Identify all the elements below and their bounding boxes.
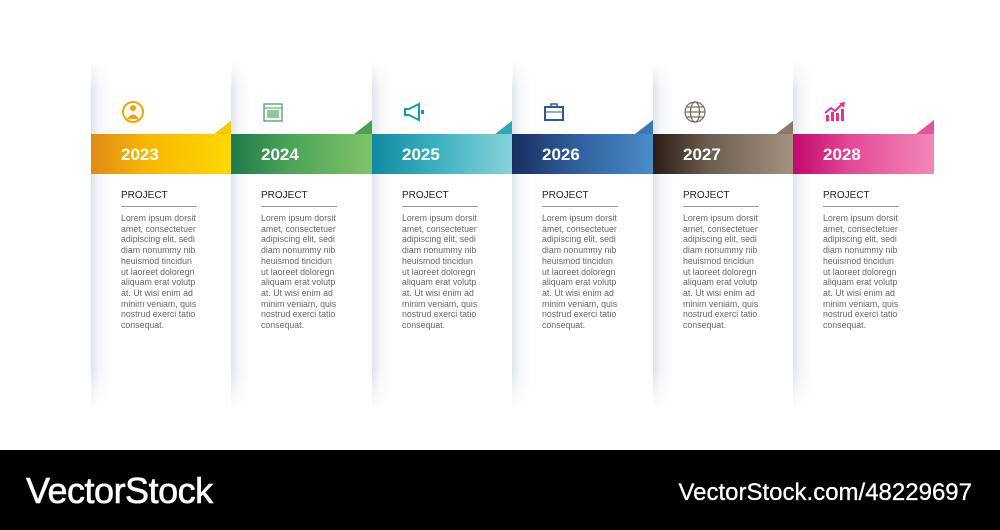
icon: calendar	[263, 103, 283, 122]
text: diam nonummy nib	[121, 245, 195, 255]
text: consequat.	[823, 320, 866, 330]
text: heuismod tincidun	[261, 256, 332, 266]
text: at. Ut wisi enim ad	[402, 288, 474, 298]
text: diam nonummy nib	[823, 245, 897, 255]
text: consequat.	[261, 320, 304, 330]
text: adipiscing elit, sedi	[261, 234, 335, 244]
text: minim veniam, quis	[823, 299, 898, 309]
text	[261, 213, 336, 330]
text: Lorem ipsum dorsit	[542, 213, 617, 223]
text: at. Ut wisi enim ad	[542, 288, 614, 298]
icon: growth chart	[824, 102, 845, 121]
text	[402, 213, 477, 330]
heading: PROJECT	[542, 190, 589, 201]
band: 2024: 2024	[261, 145, 299, 164]
text: amet, consectetuer	[261, 224, 336, 234]
text: heuismod tincidun	[683, 256, 754, 266]
text: diam nonummy nib	[261, 245, 335, 255]
heading	[261, 190, 337, 207]
text: ut laoreet doloregn	[261, 267, 334, 277]
text: ut laoreet doloregn	[121, 267, 194, 277]
text: consequat.	[542, 320, 585, 330]
text: heuismod tincidun	[402, 256, 473, 266]
text	[542, 213, 617, 330]
text: Lorem ipsum dorsit	[683, 213, 758, 223]
text: at. Ut wisi enim ad	[823, 288, 895, 298]
text: Lorem ipsum dorsit	[823, 213, 898, 223]
icon: globe	[684, 101, 706, 123]
text: nostrud exerci tatio	[402, 309, 476, 319]
heading	[121, 190, 197, 207]
panel: 2023	[91, 60, 232, 410]
heading: PROJECT	[823, 190, 870, 201]
icon: person	[122, 101, 144, 123]
heading: PROJECT	[121, 190, 168, 201]
text: nostrud exerci tatio	[121, 309, 195, 319]
heading	[683, 190, 759, 207]
text: consequat.	[402, 320, 445, 330]
text: adipiscing elit, sedi	[823, 234, 897, 244]
text: amet, consectetuer	[542, 224, 617, 234]
text: amet, consectetuer	[683, 224, 758, 234]
text: ut laoreet doloregn	[683, 267, 756, 277]
text: at. Ut wisi enim ad	[261, 288, 333, 298]
heading	[542, 190, 618, 207]
band: 2025	[372, 134, 513, 174]
band: 2026	[512, 134, 653, 174]
text	[121, 213, 196, 330]
text: aliquam erat volutp	[542, 277, 616, 287]
text: consequat.	[683, 320, 726, 330]
text: nostrud exerci tatio	[823, 309, 897, 319]
text: minim veniam, quis	[121, 299, 196, 309]
icon: megaphone	[404, 102, 424, 122]
text: ut laoreet doloregn	[542, 267, 615, 277]
text	[683, 213, 758, 330]
footer	[0, 450, 1000, 530]
heading: PROJECT	[261, 190, 308, 201]
text: minim veniam, quis	[261, 299, 336, 309]
heading	[402, 190, 478, 207]
text: nostrud exerci tatio	[542, 309, 616, 319]
heading	[823, 190, 899, 207]
text: Lorem ipsum dorsit	[261, 213, 336, 223]
text: amet, consectetuer	[121, 224, 196, 234]
text: Lorem ipsum dorsit	[402, 213, 477, 223]
icon: briefcase	[544, 103, 564, 121]
text: consequat.	[121, 320, 164, 330]
heading: PROJECT	[402, 190, 449, 201]
triangle	[776, 120, 794, 134]
text: Lorem ipsum dorsit	[121, 213, 196, 223]
triangle	[214, 120, 232, 134]
band: 2024	[231, 134, 372, 174]
text: nostrud exerci tatio	[261, 309, 335, 319]
text: minim veniam, quis	[542, 299, 617, 309]
band: 2027: 2027	[683, 145, 721, 164]
text: adipiscing elit, sedi	[121, 234, 195, 244]
band: 2028	[793, 134, 934, 174]
text: aliquam erat volutp	[121, 277, 195, 287]
text: ut laoreet doloregn	[402, 267, 475, 277]
panel: 2024	[231, 60, 372, 410]
text	[823, 213, 898, 330]
text: adipiscing elit, sedi	[542, 234, 616, 244]
text: minim veniam, quis	[402, 299, 477, 309]
band: 2027	[653, 134, 794, 174]
band: 2026: 2026	[542, 145, 580, 164]
text: adipiscing elit, sedi	[402, 234, 476, 244]
text: aliquam erat volutp	[823, 277, 897, 287]
text: aliquam erat volutp	[261, 277, 335, 287]
text: aliquam erat volutp	[402, 277, 476, 287]
text: heuismod tincidun	[823, 256, 894, 266]
panel: 2028	[793, 60, 934, 410]
heading: PROJECT	[683, 190, 730, 201]
text: at. Ut wisi enim ad	[121, 288, 193, 298]
panel: 2027	[653, 60, 794, 410]
band: 2025: 2025	[402, 145, 440, 164]
text: minim veniam, quis	[683, 299, 758, 309]
text: aliquam erat volutp	[683, 277, 757, 287]
text: adipiscing elit, sedi	[683, 234, 757, 244]
triangle	[916, 120, 934, 134]
text: amet, consectetuer	[823, 224, 898, 234]
band: 2023	[91, 134, 232, 174]
triangle	[635, 120, 653, 134]
text: at. Ut wisi enim ad	[683, 288, 755, 298]
footer url: VectorStock.com/48229697	[678, 479, 972, 506]
footer logo: VectorStock	[26, 470, 213, 511]
band: 2023: 2023	[121, 145, 159, 164]
triangle	[495, 120, 513, 134]
text: diam nonummy nib	[542, 245, 616, 255]
text: ut laoreet doloregn	[823, 267, 896, 277]
panel: 2025	[372, 60, 513, 410]
text: heuismod tincidun	[121, 256, 192, 266]
text: amet, consectetuer	[402, 224, 477, 234]
text: diam nonummy nib	[683, 245, 757, 255]
text: heuismod tincidun	[542, 256, 613, 266]
triangle	[354, 120, 372, 134]
panel: 2026	[512, 60, 653, 410]
text: diam nonummy nib	[402, 245, 476, 255]
band: 2028: 2028	[823, 145, 861, 164]
text: nostrud exerci tatio	[683, 309, 757, 319]
